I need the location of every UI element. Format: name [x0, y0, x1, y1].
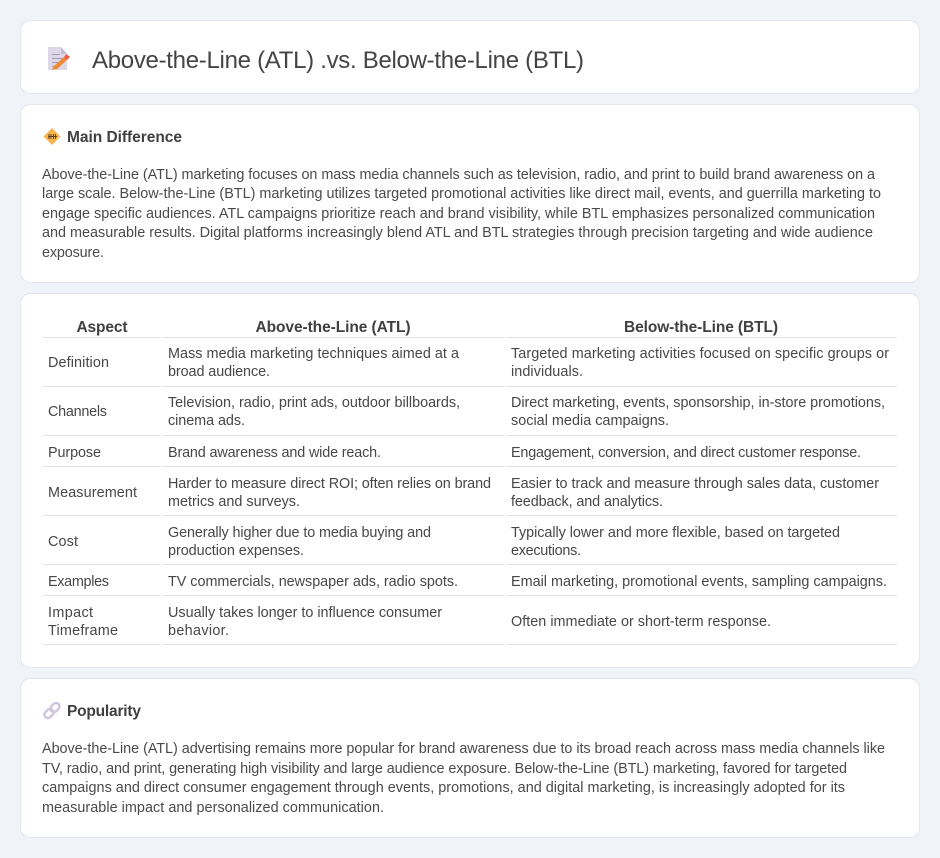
heading: main difference: Main Difference [67, 129, 182, 146]
row: measurement: Measurement [48, 485, 137, 501]
row: impact timeframe [43, 605, 897, 645]
icon: document with pencil [48, 47, 70, 70]
row: impact timeframe: behavior. [168, 623, 229, 639]
row: measurement: Harder to measure direct ROI; often relies on brand [168, 476, 491, 492]
panel: popularity [20, 678, 920, 838]
row: measurement: metrics and surveys. [168, 494, 300, 510]
title: Above-the-Line (ATL) .vs. Below-the-Line (BTL) [92, 47, 584, 74]
table header: Aspect [76, 319, 128, 336]
row: channels: cinema ads. [168, 413, 245, 429]
row: examples: TV commercials, newspaper ads, radio spots. [168, 574, 458, 590]
row: definition: Definition [48, 355, 109, 371]
row: definition: Targeted marketing activities focused on specific groups or [511, 346, 889, 362]
text block: main difference: Above-the-Line (ATL) marketing focuses on mass media channels such as television, radio, and print to build brand awareness on a [42, 167, 875, 183]
table header: Below-the-Line (BTL) [624, 319, 778, 336]
row: measurement: feedback, and analytics. [511, 494, 663, 510]
icon: warning diamond [44, 128, 60, 145]
row: impact timeframe: Usually takes longer to influence consumer [168, 605, 442, 621]
row: cost: production expenses. [168, 543, 304, 559]
text block: popularity [42, 741, 885, 816]
row: impact timeframe: Often immediate or short-term response. [511, 614, 771, 630]
row: cost: Cost [48, 534, 78, 550]
row: purpose: Purpose [48, 445, 101, 461]
text block: popularity: TV, radio, and print, generating high visibility and large audience exposure. Below-the-Line (BTL) marketing, favored for targeted [42, 761, 847, 777]
text block: main difference: and measurable results. Digital platforms increasingly blend ATL and BTL strategies through precision targeting and wide audience [42, 225, 873, 241]
row: channels: social media campaigns. [511, 413, 669, 429]
row: purpose: Engagement, conversion, and direct customer response. [511, 445, 861, 461]
panel: title header [20, 20, 920, 94]
row: definition: broad audience. [168, 364, 270, 380]
row: purpose: Brand awareness and wide reach. [168, 445, 381, 461]
row: examples: Email marketing, promotional events, sampling campaigns. [511, 574, 887, 590]
row: cost [43, 525, 897, 565]
row: purpose [43, 445, 897, 467]
panel: comparison table [20, 294, 920, 668]
row: definition [43, 346, 897, 387]
table header: Above-the-Line (ATL) [256, 319, 410, 336]
text block: popularity: Above-the-Line (ATL) advertising remains more popular for brand awareness due to its broad reach across mass media channels like [42, 741, 885, 757]
row: cost: Typically lower and more flexible, based on targeted [511, 525, 840, 541]
text block: popularity: measurable impact and personalized communication. [42, 800, 384, 816]
heading: popularity: Popularity [67, 703, 141, 720]
row: channels [43, 395, 897, 436]
row: measurement [43, 476, 897, 516]
text block: main difference: exposure. [42, 245, 104, 261]
row: cost: executions. [511, 543, 581, 559]
text block: main difference [42, 167, 881, 261]
panel: main difference [20, 104, 920, 282]
icon: chain link [43, 701, 61, 720]
row: definition: individuals. [511, 364, 583, 380]
row: channels: Direct marketing, events, sponsorship, in-store promotions, [511, 395, 885, 411]
row: channels: Television, radio, print ads, outdoor billboards, [168, 395, 460, 411]
text block: popularity: campaigns and direct consumer engagement through events, promotions, and digital marketing, is increasingly adopted for its [42, 780, 845, 796]
row: definition: Mass media marketing techniques aimed at a [168, 346, 459, 362]
text block: main difference: engage specific audiences. ATL campaigns prioritize reach and brand visibility, while BTL emphasizes personalized communication [42, 206, 875, 222]
row: channels: Channels [48, 404, 107, 420]
row: examples: Examples [48, 574, 109, 590]
row: impact timeframe: Timeframe [48, 623, 118, 639]
row: cost: Generally higher due to media buying and [168, 525, 431, 541]
row: impact timeframe: Impact [48, 605, 93, 621]
table header [43, 319, 897, 338]
row: measurement: Easier to track and measure through sales data, customer [511, 476, 879, 492]
row: examples [43, 574, 897, 596]
text block: main difference: large scale. Below-the-Line (BTL) marketing utilizes targeted promotional activities like direct mail, events, and guerrilla marketing to [42, 186, 881, 202]
